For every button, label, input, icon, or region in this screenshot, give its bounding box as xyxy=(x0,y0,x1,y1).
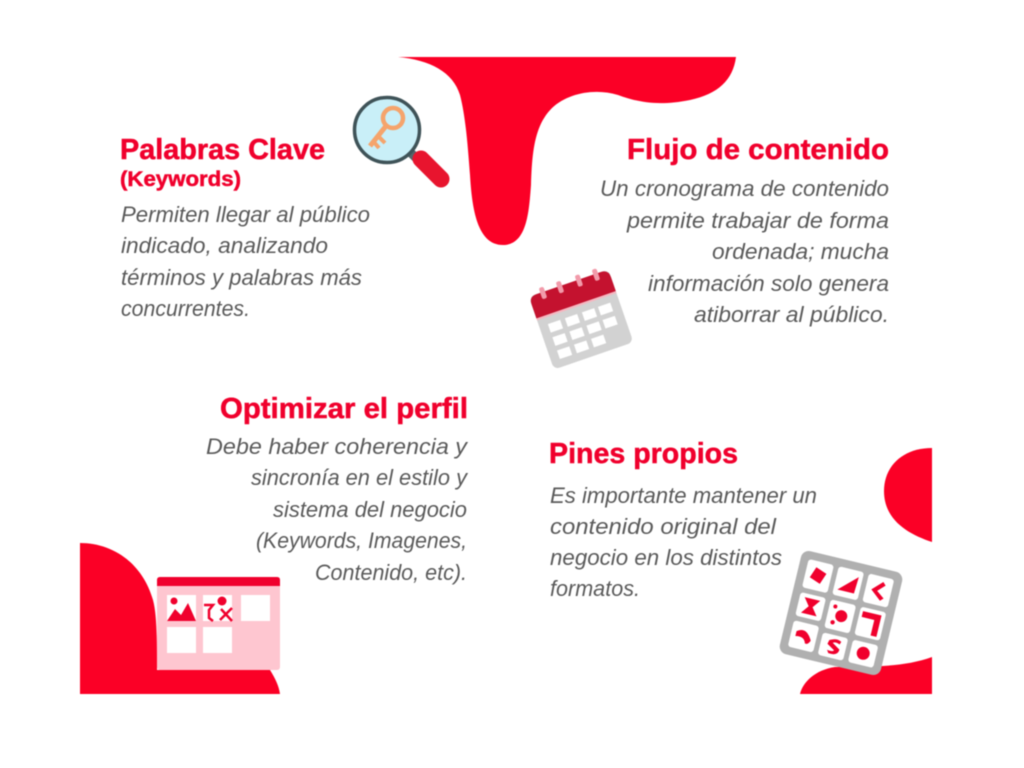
subheading: keywords: (Keywords) xyxy=(120,168,241,191)
right red half circle xyxy=(884,448,932,542)
panel: palabras clave xyxy=(120,134,370,321)
panel: optimizar el perfil xyxy=(206,393,469,585)
icon: calendar xyxy=(527,265,633,370)
text: pines description xyxy=(550,483,817,601)
bottom-left red blob xyxy=(80,543,280,694)
text: flujo description: ordenada; mucha xyxy=(712,239,889,264)
bottom-right red blob xyxy=(800,657,932,694)
text: flujo description: información solo genera xyxy=(648,271,889,296)
text: pines description: formatos. xyxy=(550,576,640,601)
text: flujo description: atiborrar al público. xyxy=(694,302,889,327)
heading: flujo de contenido: Flujo de contenido xyxy=(627,134,889,166)
panel: pines propios xyxy=(549,438,817,601)
text: optimizar description: Contenido, etc). xyxy=(315,560,467,585)
icon: magnifying glass with key xyxy=(354,98,441,179)
text: flujo description: Un cronograma de contenido xyxy=(600,176,889,201)
text: pines description: Es importante mantener un xyxy=(550,483,817,508)
text: optimizar description: sistema del negocio xyxy=(273,497,467,522)
text: palabras clave description: indicado, analizando xyxy=(121,233,328,258)
heading: palabras clave: Palabras Clave xyxy=(120,134,325,166)
text: palabras clave description: términos y palabras más xyxy=(121,265,362,290)
text: optimizar description: sincronía en el estilo y xyxy=(251,465,469,490)
text: pines description: contenido original del xyxy=(550,514,777,539)
panel: flujo de contenido xyxy=(600,134,889,327)
text: palabras clave description: Permiten llegar al público xyxy=(121,202,370,227)
icon: profile browser window xyxy=(157,577,280,670)
text: palabras clave description: concurrentes. xyxy=(121,296,250,321)
text: flujo description xyxy=(600,176,889,327)
text: optimizar description: (Keywords, Imagenes, xyxy=(256,528,467,553)
heading: optimizar el perfil: Optimizar el perfil xyxy=(220,393,468,425)
icon: pin grid xyxy=(778,549,904,677)
text: optimizar description xyxy=(206,434,469,585)
top red drip blob xyxy=(398,57,736,245)
heading: pines propios: Pines propios xyxy=(549,438,738,470)
text: optimizar description: Debe haber coherencia y xyxy=(206,434,469,459)
text: flujo description: permite trabajar de forma xyxy=(626,208,889,233)
text: pines description: negocio en los distintos xyxy=(550,545,782,570)
text: palabras clave description xyxy=(121,202,370,321)
